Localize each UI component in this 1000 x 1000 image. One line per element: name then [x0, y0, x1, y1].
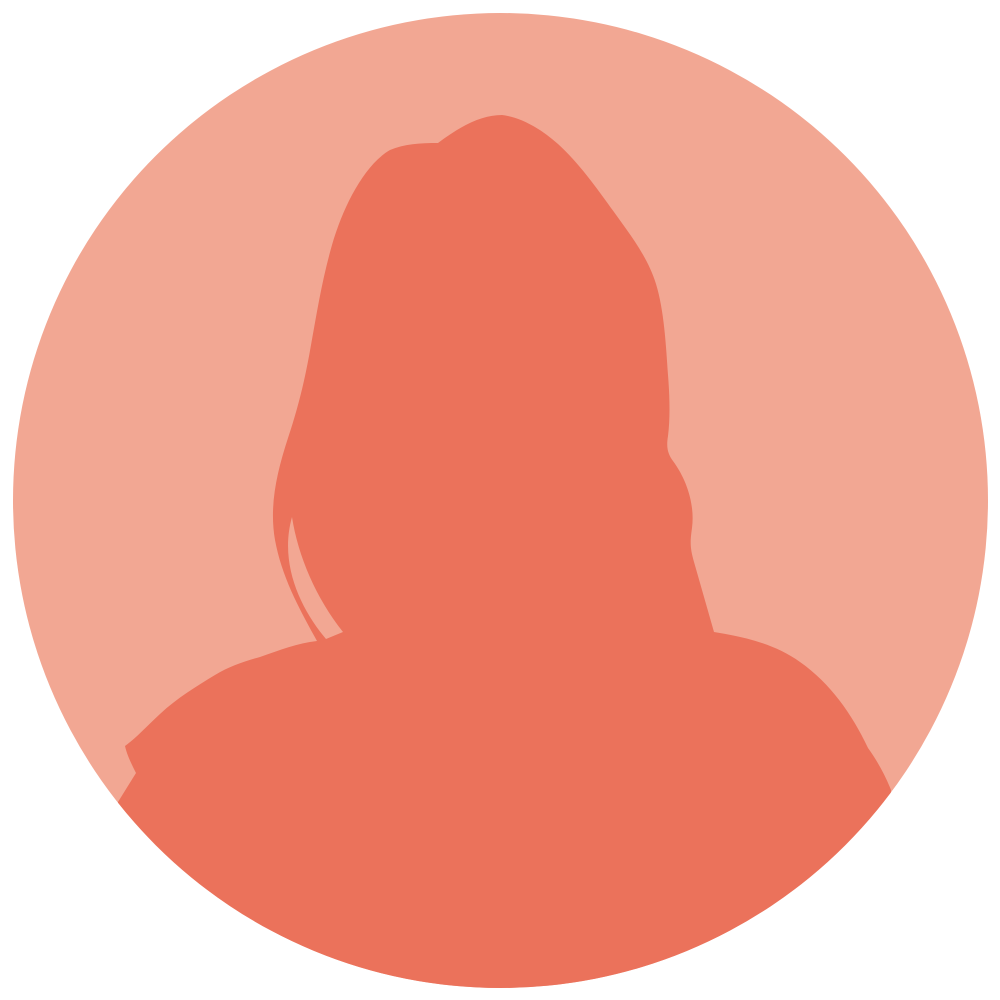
woman silhouette	[118, 115, 891, 1000]
hair highlight	[288, 517, 343, 639]
